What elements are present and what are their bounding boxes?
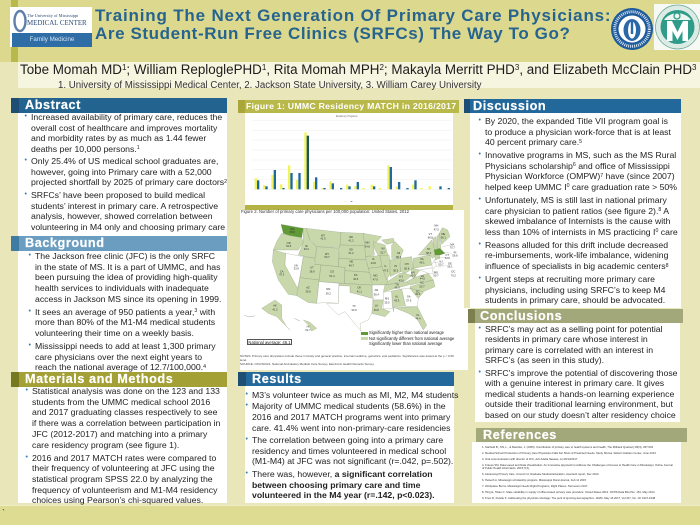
map of United States: 52.7 xyxy=(380,250,386,254)
map of United States: LA xyxy=(375,304,378,308)
map of United States: 58.3 xyxy=(426,251,432,255)
map of United States: 50.3 xyxy=(396,255,402,259)
conclusions text: with a genuine interest in primary care. It gives xyxy=(485,378,664,388)
conclusions text: based on our study doesn’t alter residency choice xyxy=(485,410,676,420)
map notes xyxy=(240,354,454,366)
map of United States: AR xyxy=(374,288,378,292)
map of United States: CA xyxy=(280,270,284,274)
map of United States: 41.1 xyxy=(357,289,362,293)
background text xyxy=(28,251,221,372)
map of United States: VT xyxy=(429,232,432,236)
discussion left margin fill xyxy=(464,113,470,308)
header accent strip xyxy=(11,0,18,62)
background left margin fill xyxy=(11,251,18,372)
background text: in the state of MS. It is a part of UMMC, and has xyxy=(35,262,220,272)
materials text: statistical program SPSS 22.0 by analyzing the xyxy=(32,474,213,484)
materials text: their frequency of volunteering at JFC using the xyxy=(32,463,215,473)
discussion text: less than 10% of internists in MS practicing I0 care xyxy=(485,227,678,237)
map of United States: 46.3 xyxy=(394,286,400,290)
title: Training The Next Generation Of Primary Care Physicians: xyxy=(95,6,611,25)
abstract text: deaths per 10,000 persons.1 xyxy=(31,144,140,154)
stray mark: ` xyxy=(2,508,5,518)
map of United States: 59.6 xyxy=(290,230,295,234)
map of United States: VA xyxy=(421,274,424,278)
background text: more than 80% of the M1-M4 medical students xyxy=(35,317,215,327)
map of United States: 62.7 xyxy=(305,328,311,332)
materials text: if there was a correlation between participation in xyxy=(32,418,220,428)
map of United States: NE xyxy=(349,260,353,264)
map of United States: WA xyxy=(290,227,295,231)
map of United States: 50.8 xyxy=(404,266,410,270)
map of United States: ND xyxy=(349,235,353,239)
map of United States: 66.8 xyxy=(428,235,433,239)
abstract text: Increased availability of primary care, reduces the xyxy=(31,112,222,122)
map of United States: RI xyxy=(454,250,457,254)
map of United States: MT xyxy=(321,234,325,238)
map of United States: WY xyxy=(325,252,329,256)
map of United States: DE xyxy=(448,261,452,265)
background text: health services to individuals with inadequate xyxy=(35,283,209,293)
discussion text: care physician to patient ratios (see figure 2).8 A xyxy=(485,206,669,216)
references text: 6. Helseth A. Mississippi scholarship program. Mississippi Rural Journal, Feb 11 2015 xyxy=(482,479,586,482)
results text: residency and times volunteered in medical school xyxy=(252,446,446,456)
references text: 2. Medical School Production of Primary Care Physicians Falls Far Short of Predicted Needs, Study Shows. Robert Graham Center, June 2013 xyxy=(482,452,656,455)
discussion text: Reasons alluded for this drift include decreased xyxy=(485,240,668,250)
materials heading: Materials and Methods xyxy=(25,372,173,386)
abstract text: students’ interest in primary care. A retrospective xyxy=(31,201,218,211)
conclusions text: medical students a hands-on learning experience xyxy=(485,389,674,399)
map of United States: OR xyxy=(287,241,291,245)
map of United States: GA xyxy=(407,294,411,298)
background text: been pursuing the idea of providing high-quality xyxy=(35,272,218,282)
map of United States: DC xyxy=(451,269,455,273)
references text: 7. Workplace Burns. Mississippi Needs Right Programs, Right Places. Hermeson 2017 xyxy=(482,485,587,488)
background header strip xyxy=(11,236,19,251)
map of United States: 39.4 xyxy=(304,247,309,251)
conclusions header strip xyxy=(468,309,475,323)
map of United States: 41.2 xyxy=(272,308,278,312)
map of United States: IN xyxy=(394,264,397,268)
map of United States: NH xyxy=(434,224,438,228)
discussion text: 40 percent primary care.5 xyxy=(485,137,582,147)
discussion text: Urgent steps at recruiting more primary care xyxy=(485,274,655,284)
map of United States: 51.4 xyxy=(329,274,335,278)
map of United States: 50.5 xyxy=(410,273,416,277)
materials text xyxy=(26,386,220,505)
map legend xyxy=(361,330,454,346)
map of United States: 43.8 xyxy=(399,279,404,283)
results text: M3’s volunteer twice as much as MI, M2, M4 students xyxy=(252,390,458,400)
map legend: Not significantly different from national average xyxy=(369,336,454,341)
map of United States: NY xyxy=(427,247,431,251)
figure 1 heading: Figure 1: UMMC Residency MATCH in 2016/2017 xyxy=(246,101,456,111)
map of United States: 53.8 xyxy=(445,256,450,260)
abstract text: Only 25.4% of US medical school graduates are, xyxy=(31,156,218,166)
discussion text xyxy=(478,116,678,305)
map of United States: 41.6 xyxy=(320,237,326,241)
abstract text: overall cost of healthcare and improves mortality xyxy=(31,122,217,132)
map of United States: NJ xyxy=(439,259,443,263)
panel: background xyxy=(11,236,227,372)
discussion heading: Discussion xyxy=(473,99,546,113)
map of United States xyxy=(244,224,458,332)
materials text: Statistical analysis was done on the 123 and 133 xyxy=(32,386,220,396)
map of United States: 36.2 xyxy=(326,291,331,295)
abstract text: however, going into Primary care with a 52,000 xyxy=(31,167,212,177)
background text: The Jackson free clinic (JFC) is the only SRFC xyxy=(35,251,215,261)
map of United States: 35.5 xyxy=(384,301,390,305)
references text: 3. Oral communication with director of JFC, Acti Adelia Nassau, on 06/14/2017 xyxy=(482,458,577,461)
map of United States: 50.7 xyxy=(419,284,425,288)
materials heading xyxy=(19,372,227,387)
map notes: SOURCE: CDC/NCHS, National Ambulatory Medical Care Survey, Electronic Health Records Survey. xyxy=(240,362,374,366)
map of United States: CT xyxy=(446,253,449,257)
logo band: Family Medicine xyxy=(30,36,74,43)
logo band xyxy=(12,33,92,47)
results text: The correlation between going into a primary care xyxy=(252,435,443,445)
map of United States: 33.8 xyxy=(351,308,357,312)
map of United States: MO xyxy=(373,273,377,277)
references body xyxy=(472,442,681,503)
logo wordmark xyxy=(27,13,87,27)
map of United States: SC xyxy=(416,289,420,293)
map of United States: AL xyxy=(395,295,399,299)
conclusions margin fill xyxy=(468,323,475,422)
map of United States: OK xyxy=(357,285,361,289)
map of United States: 37.9 xyxy=(406,298,412,302)
map of United States: 43.5 xyxy=(353,277,359,281)
conclusions heading: Conclusions xyxy=(480,309,562,323)
results text: (M1-M4) at JFC was not significant (r=.042, p=.502). xyxy=(252,456,453,466)
map of United States: 50.7 xyxy=(433,273,439,277)
map of United States: 47.3 xyxy=(279,273,285,277)
background heading xyxy=(19,236,227,251)
discussion text: students in primary care, should be advocated. xyxy=(485,295,665,305)
results text: between choosing primary care and time xyxy=(252,480,420,490)
map of United States: 44.5 xyxy=(420,277,425,281)
panel: references xyxy=(472,428,687,503)
map of United States: MI xyxy=(397,251,400,255)
title xyxy=(95,6,611,42)
map of United States: 38.5 xyxy=(393,268,399,272)
results text: There was, however, a significant correlation xyxy=(252,469,433,479)
map of United States: 39.8 xyxy=(305,290,311,294)
materials text: students from the UMMC medical school 2016 xyxy=(32,397,210,407)
panel: conclusions xyxy=(468,309,683,422)
map of United States: 38.9 xyxy=(309,270,315,274)
materials header strip xyxy=(11,372,19,387)
materials text: and 2017 graduating classes respectively to see xyxy=(32,407,217,417)
abstract heading xyxy=(19,98,227,113)
map of United States: 43.5 xyxy=(394,299,400,303)
map of United States: 54.8 xyxy=(286,244,292,248)
map of United States: 56.1 xyxy=(441,235,446,239)
map of United States: 48.7 xyxy=(349,264,354,268)
logo emblem xyxy=(13,10,27,32)
map of United States: 70.7 xyxy=(450,246,455,250)
background text: It sees an average of 950 patients a year,3 with xyxy=(35,307,215,317)
national average box: National average: 46.1 xyxy=(248,340,291,345)
conclusions text xyxy=(478,324,678,420)
map of United States: TX xyxy=(352,304,356,308)
bar chart xyxy=(245,113,453,205)
map of United States: 44.8 xyxy=(371,261,376,265)
discussion text: By 2020, the expanded Title VII program goal is xyxy=(485,116,668,126)
results heading xyxy=(246,372,454,386)
map of United States: 56.1 xyxy=(447,264,453,268)
background text: care physicians over the next eight years to xyxy=(35,352,202,362)
map of United States: 49.1 xyxy=(419,261,425,265)
map of United States: 47.5 xyxy=(434,228,439,232)
references heading xyxy=(476,428,687,442)
map of United States: 47.9 xyxy=(373,277,378,281)
map of United States: ID xyxy=(305,244,308,248)
abstract text: SRFCs’ have been proposed to build medical xyxy=(31,190,205,200)
references text: of Public Health Informatics. 2015;7(3). xyxy=(482,467,530,470)
map of United States: ME xyxy=(441,232,446,236)
map notes: NOTES: Primary care physicians include those in family and general practice, internal medicine, geriatrics, and pediatrics. Significance was tested at the p < 0.05 xyxy=(240,354,454,358)
header band xyxy=(0,0,700,62)
conclusions text: SRFC’s may act as a selling point for potential xyxy=(485,324,663,334)
abstract text: and morbidity rates by as much as 1.44 fewer xyxy=(31,133,206,143)
discussion text: helped keep UMMC I0 care graduation rate > 50% xyxy=(485,182,677,192)
discussion text: Innovative programs in MS, such as the MS Rural xyxy=(485,150,676,160)
discussion heading xyxy=(470,99,681,113)
panel: figure 1 xyxy=(238,100,459,210)
materials text: 2016 and 2017 MATCH rates were compared to xyxy=(32,453,216,463)
map of United States: TN xyxy=(395,283,399,287)
results text: volunteered in the M4 year (r=.142, p<0.023). xyxy=(252,490,435,500)
map of United States: 41.2 xyxy=(348,239,354,243)
panel: abstract xyxy=(11,98,227,236)
map of United States: IL xyxy=(385,264,387,268)
logo wordmark: The University of Mississippi xyxy=(27,13,78,18)
map of United States: MS xyxy=(385,297,389,301)
abstract text: volunteering in M4 only and choosing primary care xyxy=(31,222,225,232)
map of United States: KY xyxy=(400,275,403,279)
map notes: level. xyxy=(240,358,247,362)
map of United States: WV xyxy=(411,271,415,275)
map of United States: 36.8 xyxy=(374,308,379,312)
map of United States: PA xyxy=(420,257,424,261)
results text xyxy=(246,390,458,500)
conclusions text: SRFC’s (as seen in this study). xyxy=(485,355,604,365)
map of United States: 43.5 xyxy=(415,292,421,296)
map of United States: MD xyxy=(434,270,438,274)
materials left margin fill xyxy=(11,387,18,503)
references heading: References xyxy=(483,428,557,442)
results text: 2016 and 2017 MATCH programs went into primary xyxy=(252,412,450,422)
conclusions text: primary care is correlated with an interest in xyxy=(485,345,653,355)
map of United States: NC xyxy=(420,281,424,285)
panel: figure 2 xyxy=(240,210,470,370)
map of United States: AZ xyxy=(306,285,310,289)
results text: Majority of UMMC medical students (58.6%) in the xyxy=(252,401,446,411)
map of United States: NV xyxy=(294,263,298,267)
conclusions right margin fill xyxy=(680,323,683,422)
background text: volunteering their time on a weekly basis. xyxy=(35,328,194,338)
conclusions text: outside their traditional learning environment, but xyxy=(485,399,673,409)
logo: University of Mississippi Medical Center, Family Medicine xyxy=(10,7,92,47)
map of United States: KS xyxy=(354,273,358,277)
map of United States: 50.7 xyxy=(438,262,444,266)
figure 1 footer strip xyxy=(245,205,453,210)
map of United States: IA xyxy=(372,257,375,261)
authors panel xyxy=(18,62,700,92)
map of United States: 36.4 xyxy=(374,293,379,297)
materials text: JFC (2012-2017) and matching into a primary xyxy=(32,429,207,439)
references text: 9. Knox D, Petelle K. Addressing the physician shortage: The peril of ignoring demographics. JAMA. May 16 2017, Vol 317, No. 19: 1947-1948 xyxy=(482,497,655,500)
figure 2 caption: Figure 2. Number of primary care physicians per 100,000 population: United States, 2012 xyxy=(241,209,409,214)
conclusions heading xyxy=(475,309,683,323)
map of United States: 41.2 xyxy=(348,251,354,255)
map of United States: OH xyxy=(405,262,409,266)
map of United States: SD xyxy=(349,247,353,251)
references text: 4. Krauss SM. Data Laced and Data Visualization: An Innovative Approach to Address the Challenges of Access to Health Care in Mississippi. Online Journal xyxy=(482,464,673,467)
abstract text: projected shortfall by 2025 of primary care doctors2 xyxy=(31,177,227,187)
discussion text: Unfortunately, MS is still last in national primary xyxy=(485,195,667,205)
materials text: frequency of volunteerism and M1-M4 residency xyxy=(32,485,217,495)
references text: 1. Starfield B., Shi, L., & Macinko, J. (2005). Contribution of primary care to health systems and health. The Milbank Quarterly 83(3), 457-502 xyxy=(482,446,653,449)
results heading: Results xyxy=(252,372,302,386)
references text: 8. Hing E, Hsiao C. State variability in supply of office-based primary care providers: United States 2012. NCHS Data Brief No. 151. May 2014 xyxy=(482,491,655,494)
discussion text: influence of specialists in big academic centers8 xyxy=(485,261,669,271)
discussion text: re-imbursements, work-life imbalance, widening xyxy=(485,250,668,260)
abstract header strip xyxy=(11,98,19,113)
background text: reach the national average of 12.7/100,000.4 xyxy=(35,362,206,372)
discussion header strip xyxy=(464,99,471,113)
map of United States: MA xyxy=(450,243,455,247)
panel: materials and methods xyxy=(11,372,227,503)
map legend: Significantly higher than national average xyxy=(369,330,444,335)
results header strip xyxy=(238,372,246,386)
results left margin fill xyxy=(238,386,245,503)
map of United States: FL xyxy=(416,313,420,317)
map of United States: 50.7 xyxy=(324,255,330,259)
map of United States: 33.9 xyxy=(294,266,299,270)
panel: discussion xyxy=(464,99,681,308)
authors: Tobe Momah MD1; William ReploglePHD1, Rita Momah MPH2; Makayla Merritt PHD3, and Elizabeth McClain PHD3 xyxy=(20,62,696,77)
logo wordmark: MEDICAL CENTER xyxy=(27,20,87,27)
figure 1 header strip xyxy=(238,100,245,113)
affiliations: 1. University of Mississippi Medical Center, 2. Jackson State University, 3. William Carey University xyxy=(58,80,482,91)
map of United States: 44.4 xyxy=(415,317,421,321)
discussion text: to produce a physician work-force that is at least xyxy=(485,126,671,136)
map of United States: 54.8 xyxy=(365,245,370,249)
map of United States: 70.2 xyxy=(451,274,456,278)
logo: M emblem xyxy=(654,4,700,50)
panel: results xyxy=(238,372,454,503)
map of United States: AK xyxy=(273,304,277,308)
materials text: choices using Pearson’s chi-squared values. xyxy=(32,495,203,505)
map of United States: UT xyxy=(310,265,314,269)
conclusions text: residents in primary care whose interest in xyxy=(485,334,648,344)
map of United States: 56.8 xyxy=(452,253,458,257)
discussion text: physicians, including using SRFC’s to keep M4 xyxy=(485,285,665,295)
map of United States: MN xyxy=(365,241,369,245)
results text: care. 41.4% went into non-primary-care residencies xyxy=(252,423,450,433)
map of United States: HI xyxy=(307,325,310,329)
map of United States: 47.5 xyxy=(383,268,389,272)
materials text: care residency program (see figure 1). xyxy=(32,440,179,450)
discussion text: skewed imbalance of Internists is the cause with xyxy=(485,216,670,226)
abstract text xyxy=(24,112,227,232)
discussion text: Physician Workforce (OMPW)7 have (since 2007) xyxy=(485,171,675,181)
map legend: Significantly lower than national average xyxy=(369,341,442,346)
title: Are Student-Run Free Clinics (SRFCs) The Way To Go? xyxy=(95,24,570,42)
references text: 5. Advancing Primary Care. Council on Graduate Medical Education, twentieth report, Dec 2010 xyxy=(482,473,598,476)
bottom band xyxy=(0,505,700,525)
background text: access in Jackson MS since its opening in 1999. xyxy=(35,294,221,304)
bar chart: Residency Programs xyxy=(336,115,358,118)
background text: Mississippi needs to add at least 1,300 primary xyxy=(35,341,216,351)
conclusions text: SRFC’s improve the potential of discovering those xyxy=(485,368,678,378)
discussion text: Physicians scholarship6 and office of Mississippi xyxy=(485,161,670,171)
references text xyxy=(482,446,673,500)
abstract heading: Abstract xyxy=(25,98,81,112)
background heading: Background xyxy=(25,236,105,250)
abstract left margin fill xyxy=(11,113,18,236)
map of United States: NM xyxy=(326,287,330,291)
abstract text: analysis, however, showed correlation between xyxy=(31,211,213,221)
logo: university seal xyxy=(611,8,653,50)
map of United States: CO xyxy=(330,270,334,274)
map of United States: WI xyxy=(381,246,385,250)
